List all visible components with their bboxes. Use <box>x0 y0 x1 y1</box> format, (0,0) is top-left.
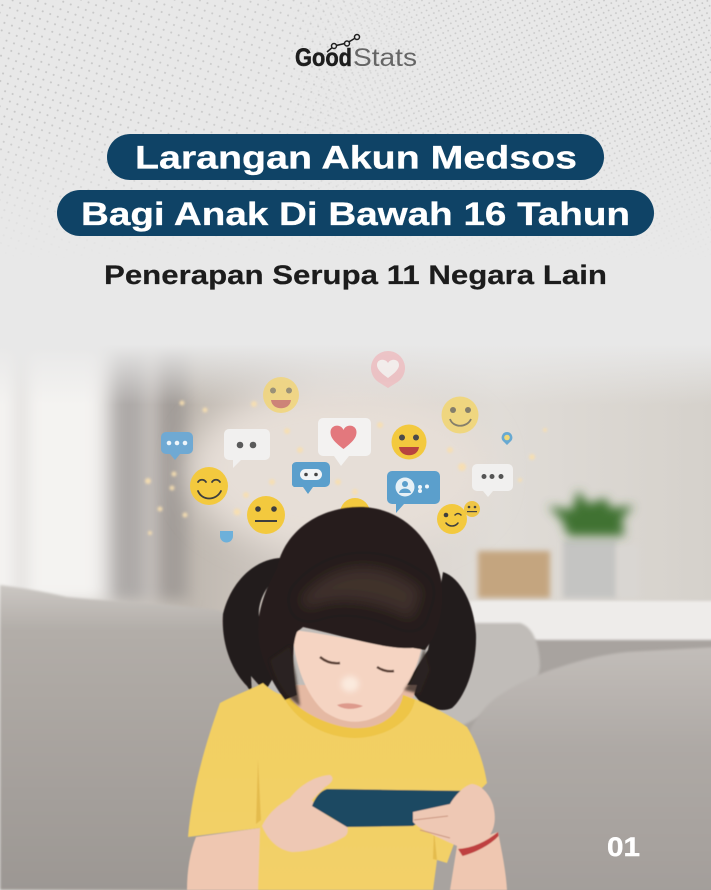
pillow <box>468 647 711 890</box>
title pill line 1 <box>107 134 604 180</box>
social icons cluster <box>161 351 513 542</box>
warm wall glow <box>190 385 490 555</box>
photo: living room background <box>0 300 711 890</box>
icon: faded grin emoji <box>263 377 299 413</box>
plant and pots <box>478 490 639 598</box>
sofa cushion right <box>260 623 540 727</box>
icon: small neutral emoji <box>464 501 480 517</box>
icon: pink heart pin <box>371 351 405 388</box>
hair highlight <box>300 567 422 620</box>
logo: GoodStats <box>295 34 417 72</box>
logo: GoodStats: Stats <box>353 44 417 72</box>
bracelet <box>458 832 498 856</box>
yellow shirt <box>188 683 487 890</box>
arms <box>187 828 507 890</box>
facial features <box>320 657 394 709</box>
icon: white dots bubble <box>472 464 513 497</box>
face <box>293 630 422 722</box>
right hand <box>413 784 495 847</box>
title pill line 1: Larangan Akun Medsos <box>135 140 577 176</box>
icon: blue robot bubble <box>292 462 330 494</box>
icon: half emoji behind hair <box>340 498 370 528</box>
title pill line 2: Bagi Anak Di Bawah 16 Tahun <box>81 196 630 232</box>
icon: faded smile emoji <box>442 396 478 434</box>
icon: grin emoji <box>392 424 426 460</box>
shirt collar <box>285 695 415 738</box>
icon: white chat bubble <box>224 429 270 468</box>
smartphone <box>312 789 475 827</box>
left hand <box>262 775 348 852</box>
shelf <box>470 601 711 651</box>
hair <box>258 507 442 700</box>
title pill line 2 <box>57 190 654 236</box>
pigtail right <box>406 572 476 710</box>
hair wisps <box>270 646 430 706</box>
icon: small location pin <box>502 432 512 445</box>
icon: blue chat bubble <box>161 432 193 460</box>
halftone dot pattern <box>0 0 711 228</box>
icon: wink emoji <box>437 504 467 534</box>
subtitle: Penerapan Serupa 11 Negara Lain <box>104 260 607 290</box>
curtain <box>0 345 188 600</box>
neck <box>283 685 417 739</box>
pigtail left <box>223 558 289 694</box>
icon: blue profile bubble <box>387 471 440 513</box>
icon: closed eye smile emoji <box>190 467 228 505</box>
sofa <box>0 585 711 890</box>
icon: heart bubble <box>318 418 371 466</box>
child with phone <box>187 507 507 890</box>
icon: neutral emoji <box>247 496 285 534</box>
sofa cushion left <box>0 585 267 890</box>
icon: small blue bubble <box>220 531 233 542</box>
shirt shading <box>256 760 437 860</box>
page number: 01 <box>607 832 640 862</box>
sofa backrest band <box>200 640 711 890</box>
bokeh sparkles <box>145 400 547 535</box>
logo: GoodStats: Good <box>295 44 352 72</box>
fade to background <box>0 300 711 405</box>
icon: trend line <box>327 34 360 52</box>
